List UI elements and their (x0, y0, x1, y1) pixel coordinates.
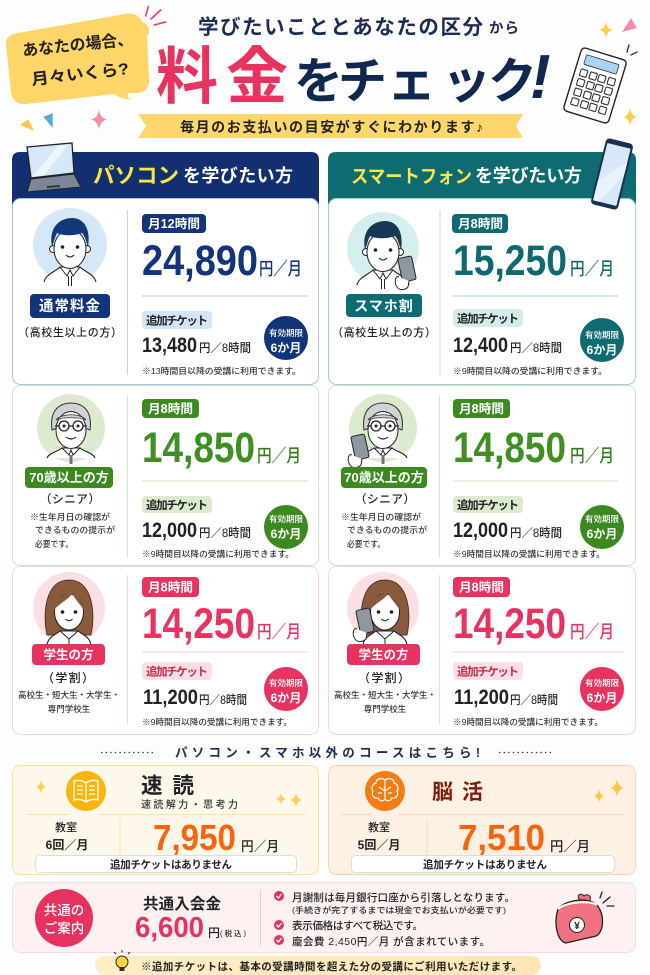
audience: （学割） (358, 670, 410, 685)
ticket price (453, 334, 562, 357)
validity badge: 6か月 (587, 691, 617, 705)
panel: 学生 スマホ (328, 566, 636, 734)
frequency: 教室 (368, 820, 390, 834)
price (458, 817, 590, 858)
hours pill (452, 214, 508, 233)
validity badge: 6か月 (587, 343, 617, 357)
ticket pill: 追加チケット (146, 664, 208, 678)
ticket price: 円／8時間 (510, 340, 562, 355)
check list: 龐会費 2,450円／月 が含まれています。 (292, 935, 490, 948)
ticket price (454, 686, 558, 709)
ticket price: 11,200 (454, 686, 509, 709)
icon: confetti right (600, 18, 637, 126)
badge (347, 644, 420, 665)
badge (346, 294, 422, 317)
panel: スマホ割 (328, 198, 636, 384)
ticket price (143, 686, 247, 709)
hours pill: 月12時間 (148, 216, 200, 231)
price: 14,250 (142, 600, 255, 648)
panel header: パソコン: を学びたい方 (183, 165, 293, 186)
eligibility note: 専門学校生 (48, 704, 91, 714)
badge (30, 294, 110, 318)
note: ※9時間目以降の受講に利用できます。 (142, 549, 294, 559)
frequency: 6回／月 (46, 838, 88, 852)
eligibility note: ※生年月日の確認が (341, 512, 422, 522)
ticket price (142, 519, 251, 542)
fee price: 6,600 (135, 912, 204, 944)
no ticket pill: 追加チケットはありません (110, 858, 232, 871)
icon: smartphone (590, 138, 634, 210)
avatar: student (33, 572, 105, 649)
badge: スマホ割 (354, 298, 414, 314)
avatar: student with phone (347, 572, 419, 649)
speech bubble: 月々いくら? (30, 60, 130, 89)
frequency (46, 820, 88, 852)
eligibility note: 専門学校生 (364, 704, 407, 714)
hours pill: 月8時間 (148, 401, 193, 416)
ticket pill: 追加チケット (146, 314, 208, 328)
ticket price: 11,200 (143, 686, 198, 709)
price: 14,250 (453, 600, 566, 648)
audience: （シニア） (355, 493, 415, 506)
badge circle (35, 889, 93, 947)
ticket price: 13,480 (142, 334, 197, 357)
price: 円／月 (570, 446, 614, 466)
check list (274, 891, 515, 948)
title: をチェック!: をチェック (294, 55, 537, 109)
hours pill (453, 577, 510, 597)
validity badge: 6か月 (587, 527, 617, 541)
validity badge: 6か月 (271, 341, 301, 355)
fee price: (税込) (220, 928, 246, 938)
price: 円／月 (257, 622, 301, 642)
audience: （高校生以上の方） (332, 325, 436, 339)
icon: purse (556, 892, 614, 943)
ticket price: 円／8時間 (199, 525, 251, 540)
panel: シニア スマホ (328, 386, 636, 566)
ticket pill: 追加チケット (457, 312, 519, 326)
validity badge (580, 505, 624, 549)
frequency (358, 820, 400, 852)
ticket price: 12,000 (142, 519, 197, 542)
ticket pill (142, 496, 212, 513)
eligibility note: できるものの提示が (347, 525, 428, 535)
ribbon (138, 114, 523, 138)
badge (341, 467, 427, 488)
avatar: man (33, 208, 107, 286)
validity badge: 6か月 (271, 691, 301, 705)
ticket price: 円／8時間 (199, 692, 247, 707)
section heading: パソコン・スマホ以外のコースはこちら! (175, 745, 480, 760)
validity badge: 有効期限 (269, 328, 303, 338)
frequency: 5回／月 (358, 838, 400, 852)
price: 円／月 (257, 446, 301, 466)
icon: calculator (563, 47, 627, 124)
hours pill: 月8時間 (459, 580, 504, 594)
eligibility note: 高校生・短大生・大学生・ (18, 690, 120, 700)
badge: 学生の方 (358, 647, 409, 662)
ticket pill (142, 311, 212, 329)
ticket price: 円／8時間 (510, 525, 562, 540)
panel header: スマートフォン (328, 152, 636, 204)
no ticket pill (352, 856, 614, 872)
ticket pill (453, 309, 523, 327)
ticket price (453, 519, 562, 542)
badge (25, 467, 113, 488)
eligibility note (334, 690, 436, 714)
badge circle: 共通の (44, 903, 84, 918)
badge (32, 644, 105, 665)
title: 料金: 料金 (156, 43, 296, 112)
note: ※9時間目以降の受講に利用できます。 (453, 366, 607, 376)
eligibility note (341, 512, 428, 549)
ticket pill: 追加チケット (457, 498, 519, 512)
ticket price: 円／8時間 (199, 340, 251, 355)
icon: bulb (114, 950, 130, 971)
icon: book (66, 771, 106, 811)
price: 円／月 (550, 839, 590, 854)
avatar: senior (37, 394, 105, 464)
title line: から (489, 20, 519, 37)
hours pill: 月8時間 (459, 401, 504, 416)
sparkles (594, 779, 624, 803)
eligibility note: できるものの提示が (35, 525, 116, 535)
audience: （学割） (42, 670, 94, 685)
ticket price: 12,000 (453, 519, 508, 542)
hours pill (142, 214, 206, 233)
badge: 70歳以上の方 (29, 470, 109, 485)
frequency: 教室 (55, 820, 77, 834)
price: 24,890 (142, 237, 258, 285)
ticket price: 円／8時間 (510, 692, 558, 707)
note: ※9時間目以降の受講に利用できます。 (453, 549, 605, 559)
eligibility note: 必要です。 (35, 539, 73, 549)
ticket pill (453, 662, 523, 680)
icon: purse: ¥ (574, 921, 580, 932)
icon: confetti left (20, 110, 107, 131)
hours pill: 月8時間 (148, 580, 193, 594)
ticket pill: 追加チケット (457, 664, 519, 678)
ribbon: 毎月のお支払いの目安がすぐにわかります♪ (180, 119, 483, 135)
eligibility note (18, 690, 120, 714)
hours pill (453, 399, 510, 418)
validity badge: 有効期限 (585, 678, 619, 688)
validity badge (264, 316, 308, 360)
check list: (手続きが完了するまでは現金でお支払いが必要です) (292, 905, 506, 915)
audience: （シニア） (40, 493, 100, 506)
check list: 表示価格はすべて税込です。 (292, 919, 423, 932)
validity badge: 有効期限 (585, 514, 619, 524)
price: 14,850 (142, 424, 255, 472)
validity badge: 有効期限 (269, 514, 303, 524)
validity badge (264, 505, 308, 549)
hours pill (142, 577, 199, 597)
panel header: パソコン (12, 152, 319, 204)
sparkles (36, 780, 302, 807)
badge: 学生の方 (43, 647, 94, 662)
panel: 共通のご案内 (12, 882, 636, 952)
avatar: man with phone (347, 212, 419, 290)
price: 7,510 (458, 817, 545, 858)
panel: シニア パソコン (12, 386, 318, 566)
validity badge: 6か月 (271, 527, 301, 541)
badge circle: ご案内 (44, 920, 84, 936)
fee label: 共通入会金 (143, 894, 221, 913)
price: 円／月 (570, 622, 614, 642)
ticket price: 12,400 (453, 334, 508, 357)
price: 15,250 (453, 237, 567, 285)
panel header: スマートフォン: スマートフォン (351, 166, 472, 187)
icon: brain (365, 771, 405, 811)
panel: 脳活 (328, 766, 636, 874)
title line: 学びたいこととあなたの区分 (198, 16, 484, 39)
fee price (135, 912, 246, 944)
badge: 通常料金 (39, 297, 101, 315)
badge: 70歳以上の方 (344, 470, 424, 485)
price: 円／月 (241, 839, 279, 854)
panel header: パソコン: パソコン (93, 164, 179, 188)
avatar: senior with phone (348, 394, 417, 468)
speech bubble (6, 13, 149, 104)
price: 14,850 (453, 424, 566, 472)
validity badge (580, 318, 624, 362)
icon: laptop (27, 143, 81, 192)
validity badge: 有効期限 (585, 330, 619, 340)
panel: 速読 (12, 766, 318, 874)
note: ※9時間目以降の受講に利用できます。 (453, 717, 603, 727)
ticket pill: 追加チケット (146, 498, 208, 512)
ticket pill (453, 496, 523, 513)
validity badge (264, 667, 308, 711)
ticket pill (142, 662, 212, 680)
title: をチェック!: ! (530, 43, 551, 112)
panel: 学生 パソコン (12, 566, 318, 734)
note: ※9時間目以降の受講に利用できます。 (142, 717, 292, 727)
validity badge: 有効期限 (269, 678, 303, 688)
no ticket pill: 追加チケットはありません (423, 858, 548, 871)
panel header: スマートフォン: を学びたい方 (475, 165, 582, 186)
course title: 脳活 (432, 781, 492, 804)
ticket price (142, 334, 251, 357)
audience: （高校生以上の方） (18, 325, 122, 339)
price: 円／月 (259, 259, 302, 279)
eligibility note: 必要です。 (347, 539, 385, 549)
eligibility note (30, 512, 116, 549)
price: 円／月 (570, 259, 614, 279)
speech bubble: あなたの場合、 (22, 30, 134, 60)
eligibility note: ※生年月日の確認が (30, 512, 111, 522)
note: ※13時間目以降の受講に利用できます。 (142, 366, 301, 376)
eligibility note: 高校生・短大生・大学生・ (334, 690, 436, 700)
check list: 月謝制は毎月銀行口座から引落しとなります。 (292, 891, 515, 904)
footer note: ※追加チケットは、基本の受講時間を超えた分の受講にご利用いただけます。 (141, 960, 522, 973)
validity badge (580, 667, 624, 711)
course title: 速読 (141, 774, 204, 798)
icon: burst lines (146, 7, 166, 25)
panel: 通常料金 パソコン (12, 198, 318, 384)
no ticket pill (36, 856, 296, 872)
course subtitle: 速読解力・思考力 (141, 798, 238, 811)
hours pill: 月8時間 (458, 216, 503, 231)
hours pill (142, 399, 199, 418)
price: 7,950 (153, 817, 236, 858)
footer note (95, 950, 541, 975)
fee price: 円 (208, 926, 220, 940)
